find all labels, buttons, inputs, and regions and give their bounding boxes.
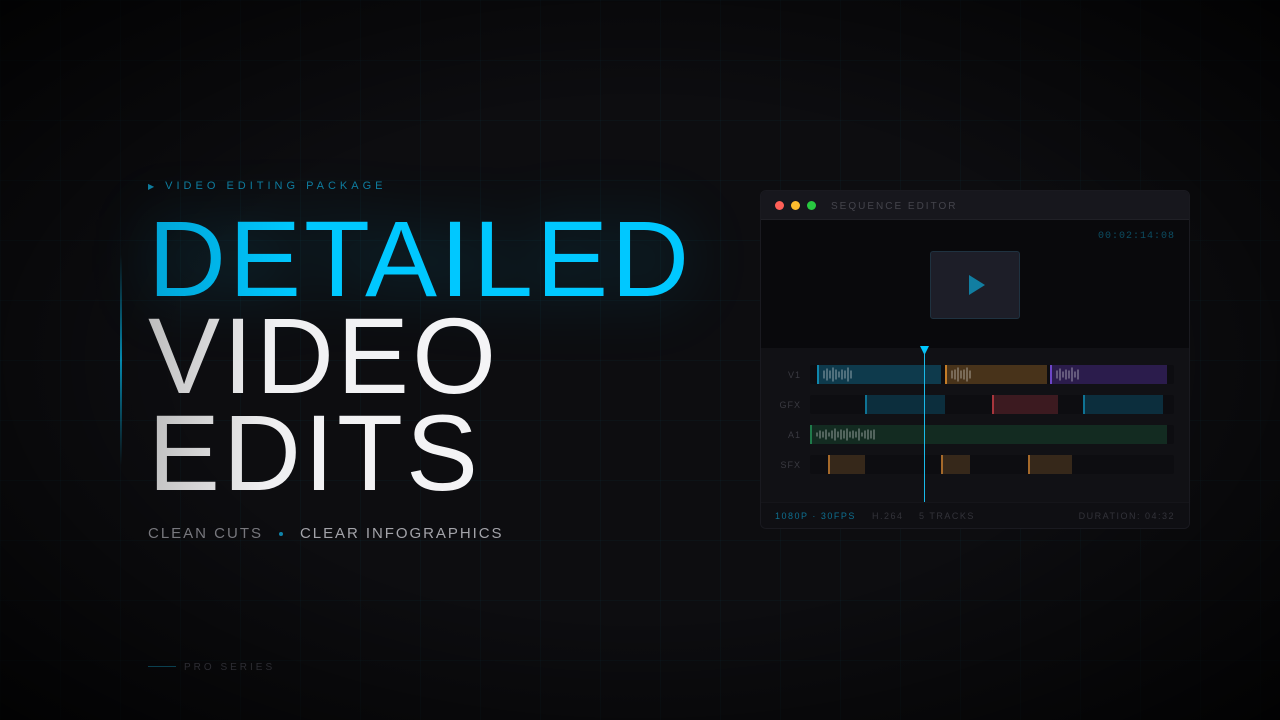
eyebrow label: ▶ VIDEO EDITING PACKAGE xyxy=(148,180,386,192)
title line: video: VIDEO xyxy=(148,295,499,416)
clip: orange xyxy=(945,365,1047,384)
track label A1: A1 xyxy=(788,430,801,440)
subtitle dot xyxy=(279,532,283,536)
status: tracks: 5 TRACKS xyxy=(919,511,975,521)
status: format: 1080P · 30FPS xyxy=(775,511,856,521)
status: codec: H.264 xyxy=(872,511,904,521)
preview area xyxy=(761,220,1189,348)
track label V1: V1 xyxy=(788,370,801,380)
clip: sfx 1 xyxy=(828,455,865,474)
clip: sfx 2 xyxy=(941,455,970,474)
track GFX xyxy=(810,395,1174,414)
series text: PRO SERIES xyxy=(184,662,275,673)
status: duration: DURATION: 04:32 xyxy=(1079,511,1175,521)
thumbnail with play icon xyxy=(930,251,1020,319)
clip: cyan 2 xyxy=(1083,395,1163,414)
clip: sfx 3 xyxy=(1028,455,1072,474)
traffic lights xyxy=(775,201,816,210)
accent vertical line xyxy=(120,255,122,465)
status bar xyxy=(761,502,1189,528)
track label SFX: SFX xyxy=(780,460,801,470)
title line: detailed: DETAILED xyxy=(148,198,692,319)
subtitle right: CLEAR INFOGRAPHICS xyxy=(300,525,503,542)
window title: SEQUENCE EDITOR xyxy=(831,201,958,212)
subtitle xyxy=(148,525,503,542)
track A1 xyxy=(810,425,1174,444)
playhead xyxy=(920,346,929,502)
subtitle left: CLEAN CUTS xyxy=(148,525,263,542)
clip: red xyxy=(992,395,1058,414)
clip: purple xyxy=(1050,365,1167,384)
timecode: 00:02:14:08 xyxy=(1098,231,1175,242)
track label GFX: GFX xyxy=(779,400,801,410)
series rule xyxy=(148,666,176,667)
track V1 xyxy=(810,365,1174,384)
title line: edits: EDITS xyxy=(148,392,481,513)
panel: sequence editor xyxy=(760,190,1190,529)
clip: cyan xyxy=(817,365,941,384)
clip: green xyxy=(810,425,1167,444)
title xyxy=(148,198,692,513)
timeline area xyxy=(761,348,1189,502)
clip: cyan 1 xyxy=(865,395,945,414)
title bar xyxy=(761,191,1189,220)
track SFX xyxy=(810,455,1174,474)
